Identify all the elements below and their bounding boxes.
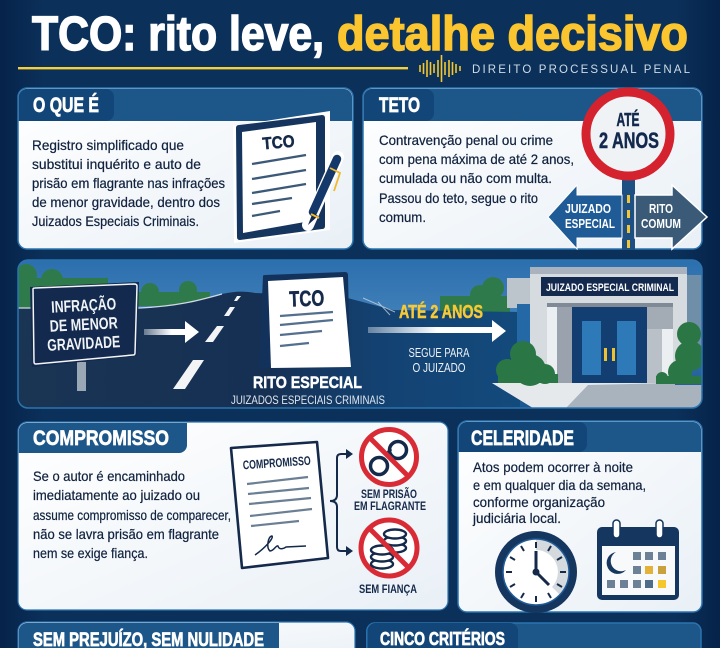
text: compromisso de comparecer: nem se exige fiança. (33, 545, 148, 561)
heading: o que é: O QUE É (33, 94, 99, 117)
text: limite de pena (379, 132, 574, 225)
text: definição: Registro simplificado que (32, 137, 184, 153)
label: rito especial: RITO ESPECIAL (253, 373, 362, 392)
icon: placa até 2 anos com setas (548, 92, 707, 250)
building: juizado especial criminal: JUIZADO ESPECIAL CRIMINAL (546, 282, 674, 294)
text: atos à noite: e em qualquer dia da semana, (473, 477, 646, 493)
text: compromisso de comparecer (33, 468, 231, 561)
text: definição (32, 137, 225, 229)
icon: placa até 2 anos com setas: RITO (649, 202, 673, 216)
panel: cinco critérios (367, 623, 701, 648)
label: segue para o juizado: O JUIZADO (412, 361, 466, 375)
icon: documento TCO com caneta: TCO (262, 132, 295, 153)
label: juizados especiais criminais: JUIZADOS ESPECIAIS CRIMINAIS (231, 395, 385, 407)
text: compromisso de comparecer: Se o autor é encaminhado (33, 468, 185, 484)
text: definição: prisão em flagrante nas infrações (32, 175, 225, 191)
text: compromisso de comparecer: assume compromisso de comparecer, (33, 507, 231, 523)
text: definição: substitui inquérito e auto de (32, 156, 201, 172)
icon: sem prisão em flagrante (362, 430, 416, 484)
bracket arrows (330, 449, 353, 556)
bushes (496, 322, 705, 386)
icon: placa até 2 anos com setas: ESPECIAL (565, 217, 615, 231)
building: juizado especial criminal (492, 267, 702, 408)
heading: teto: TETO (379, 94, 420, 117)
sign: infração de menor gravidade: INFRAÇÃO (51, 293, 117, 317)
sign: infração de menor gravidade (30, 282, 139, 391)
text: atos à noite: Atos podem ocorrer à noite (473, 459, 633, 475)
icon: sem fiança (361, 520, 417, 576)
text: atos à noite (472, 459, 646, 526)
icon: termo de compromisso (231, 442, 328, 568)
label: sem prisão em flagrante (354, 488, 426, 513)
text: compromisso de comparecer: não se lavra prisão em flagrante (33, 526, 219, 542)
subtitle rule with waveform: DIREITO PROCESSUAL PENAL (472, 64, 691, 76)
panel: teto (363, 88, 707, 250)
subtitle rule with waveform (18, 55, 691, 82)
icon: documento TCO com caneta (233, 111, 340, 243)
icon: documento TCO (259, 272, 351, 368)
text: limite de pena: Contravenção penal ou crime (379, 132, 553, 148)
road (18, 292, 520, 408)
panel: faixa da estrada (15, 260, 705, 408)
text: definição: Juizados Especiais Criminais. (32, 213, 199, 229)
icon: placa até 2 anos com setas: JUIZADO (565, 202, 611, 216)
panel: celeridade (458, 421, 702, 612)
text: limite de pena: cumulada ou não com multa. (379, 170, 552, 186)
trees (15, 264, 510, 312)
label: segue para o juizado: SEGUE PARA (408, 346, 470, 360)
heading: celeridade: CELERIDADE (471, 427, 574, 450)
label: sem prisão em flagrante: EM FLAGRANTE (354, 501, 426, 513)
title: detalhe decisivo (337, 8, 688, 61)
icon: calendário (597, 520, 679, 600)
label: sem prisão em flagrante: SEM PRISÃO (361, 488, 417, 501)
icon: placa até 2 anos com setas: 2 ANOS (599, 128, 659, 153)
arrow: para o juizado (368, 320, 506, 342)
panel: o que é (18, 88, 353, 249)
arrow: para o rito especial (144, 321, 199, 343)
text: atos à noite: conforme organização (473, 494, 605, 510)
panel: sem prejuízo, sem nulidade (18, 622, 355, 648)
text: limite de pena: com pena máxima de até 2 anos, (379, 151, 574, 167)
sign: infração de menor gravidade: DE MENOR (49, 314, 118, 336)
icon: termo de compromisso: COMPROMISSO (242, 454, 311, 472)
label: segue para o juizado (408, 348, 470, 372)
road dashes (173, 296, 241, 389)
text: atos à noite: judiciária local. (472, 510, 561, 526)
icon: relógio (499, 535, 573, 609)
title: TCO: rito leve, (32, 8, 324, 61)
band border (18, 260, 702, 408)
text: limite de pena: comum. (379, 209, 426, 225)
text: definição: de menor gravidade, dentro dos (32, 194, 220, 210)
panel: compromisso (18, 422, 448, 610)
icon: placa até 2 anos com setas: COMUM (641, 217, 681, 231)
text: compromisso de comparecer: imediatamente ao juizado ou (33, 487, 200, 503)
title (32, 8, 688, 61)
label: sem fiança: SEM FIANÇA (359, 584, 417, 596)
text: limite de pena: Passou do teto, segue o rito (379, 190, 538, 206)
sign: infração de menor gravidade: GRAVIDADE (47, 333, 121, 355)
arrow: juizado especial (548, 185, 622, 249)
icon: documento TCO: TCO (289, 285, 325, 312)
arrow: rito comum (635, 185, 707, 249)
icon: placa até 2 anos com setas: ATÉ (616, 109, 640, 130)
heading: compromisso: COMPROMISSO (33, 427, 169, 450)
label: até 2 anos: ATÉ 2 ANOS (399, 301, 483, 322)
